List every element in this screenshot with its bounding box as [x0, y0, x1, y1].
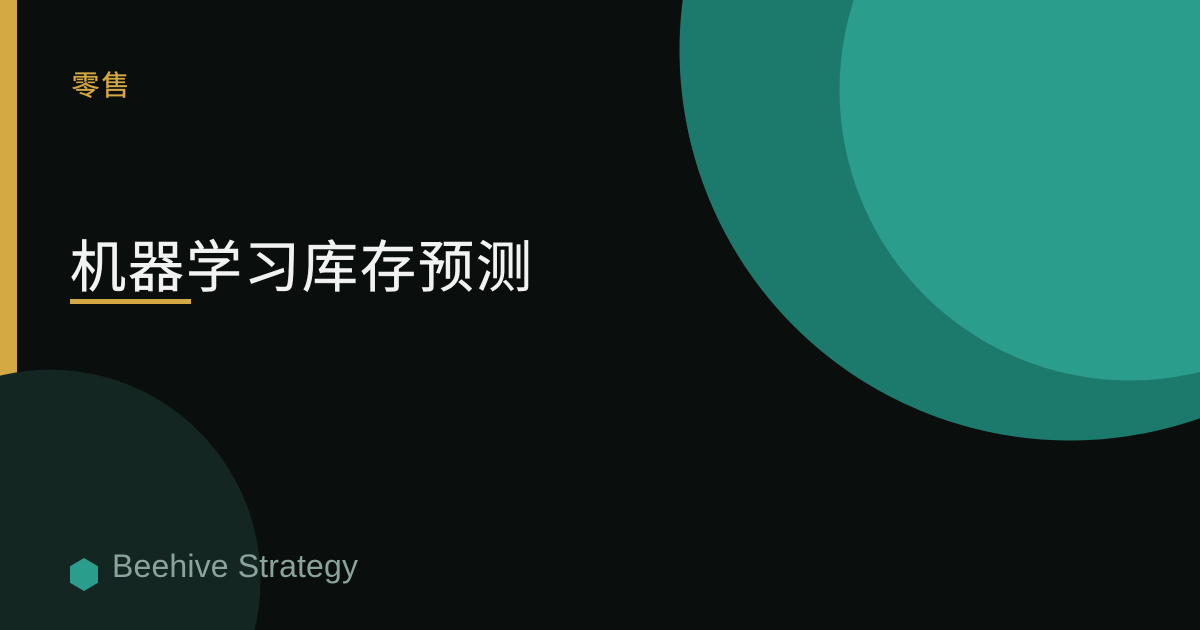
- decorative circle: inner bright teal: [840, 0, 1200, 380]
- decorative circle: large dark teal: [680, 0, 1200, 440]
- title underline: [70, 299, 191, 304]
- decorative circle: bottom left dark: [0, 370, 260, 630]
- icon: hexagon logo: [70, 558, 98, 591]
- accent bar: left edge: [0, 0, 17, 630]
- title: 机器学习库存预测: [70, 236, 534, 299]
- brand name: Beehive Strategy: [112, 548, 358, 584]
- category label: 零售: [72, 70, 132, 101]
